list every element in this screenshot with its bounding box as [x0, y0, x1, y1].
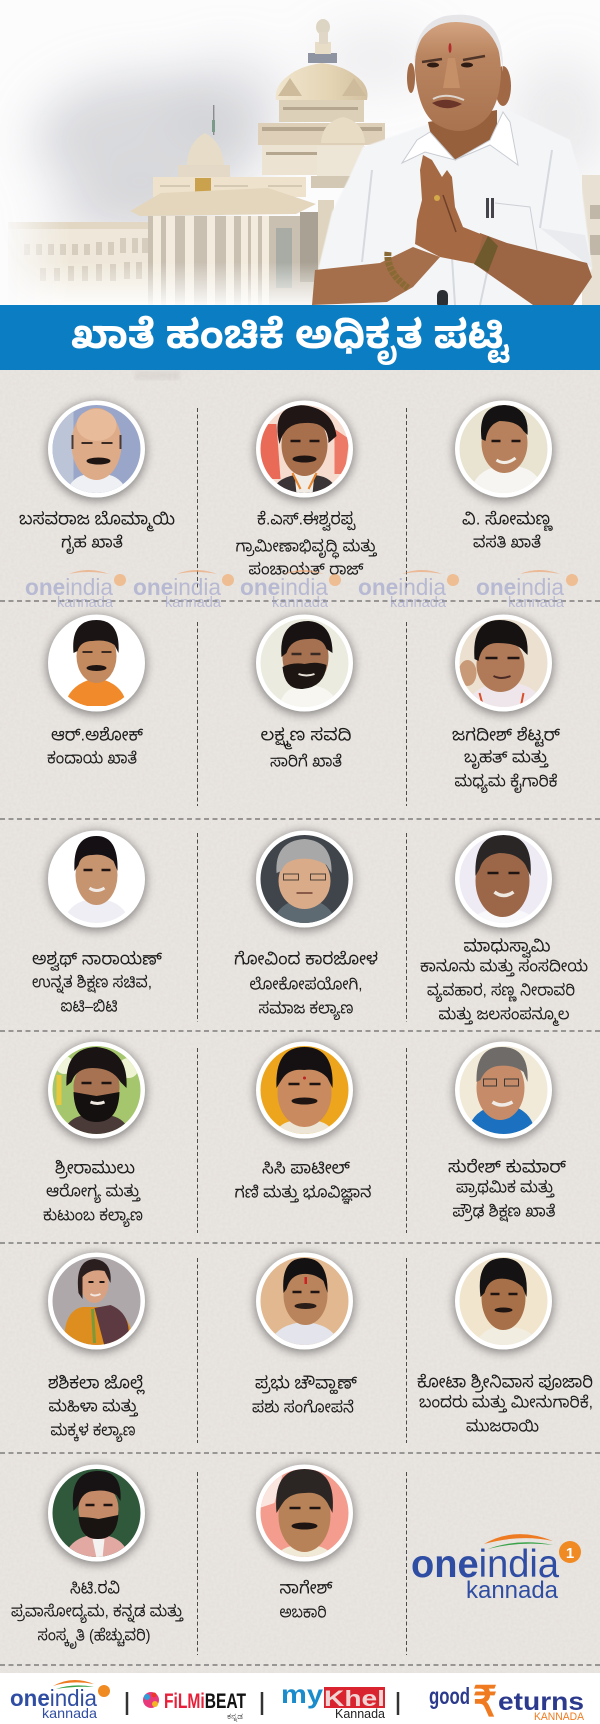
header illustration: [0, 0, 600, 308]
name and portfolio: [47, 726, 144, 768]
watermarks: oneindia kannada: [25, 570, 578, 611]
watermarks: oneindia kannada: kannada: [508, 595, 565, 611]
head: [407, 15, 511, 131]
logo: goodReturns: good: [429, 1683, 470, 1709]
name and portfolio: ಶ್ರೀರಾಮುಲು: [55, 1158, 135, 1180]
logo: oneindia kannada large: oneindia: [411, 1543, 559, 1586]
portrait: [46, 400, 146, 501]
name and portfolio: ಮಕ್ಕಳ ಕಲ್ಯಾಣ: [50, 1422, 136, 1442]
name and portfolio: [252, 1374, 358, 1416]
name and portfolio: ಸಾರಿಗೆ ಖಾತೆ: [270, 754, 342, 770]
name and portfolio: ಸಿಟಿ.ರವಿ: [70, 1578, 120, 1598]
minister: K.S. Eshwarappa: [236, 400, 377, 578]
logo: goodReturns: eturns: [498, 1688, 584, 1716]
minister: R. Ashok: [46, 614, 146, 768]
name and portfolio: ಪಂಚಾಯತ್ ರಾಜ್: [248, 562, 364, 578]
portrait: [254, 830, 354, 931]
watermarks: oneindia kannada: oneindia: [25, 574, 113, 600]
name and portfolio: [236, 510, 377, 578]
name and portfolio: ಆರೋಗ್ಯ ಮತ್ತು: [46, 1184, 141, 1204]
shirt: [318, 124, 592, 272]
logo: Filmibeat: FiLMiBEAT: [164, 1690, 246, 1713]
logo: goodReturns: [429, 1678, 585, 1724]
name and portfolio: [260, 726, 352, 770]
portrait: [254, 614, 354, 715]
wristwatch: [474, 236, 498, 272]
name and portfolio: ಜಗದೀಶ್ ಶೆಟ್ಟರ್: [452, 726, 561, 748]
logo: oneindia kannada large: [411, 1534, 581, 1604]
logo: goodReturns: ₹: [473, 1678, 497, 1724]
minister: C.T. Ravi: [11, 1464, 184, 1650]
minister: Basavaraj Bommai: [19, 400, 175, 554]
logo: myKhel: [281, 1679, 386, 1721]
name and portfolio: ಗ್ರಾಮೀಣಾಭಿವೃದ್ಧಿ ಮತ್ತು: [236, 538, 377, 560]
name and portfolio: ಲೋಕೋಪಯೋಗಿ,: [250, 976, 362, 994]
logo: oneindia kannada: oneindia: [10, 1685, 97, 1711]
logo: Filmibeat: ಕನ್ನಡ: [227, 1711, 243, 1722]
portrait: [254, 400, 354, 501]
minister: Shashikala Jolle: [46, 1252, 146, 1442]
name and portfolio: ಪ್ರಾಥಮಿಕ ಮತ್ತು: [456, 1180, 555, 1198]
name and portfolio: ಬೃಹತ್ ಮತ್ತು: [464, 750, 549, 770]
name and portfolio: ಸುರೇಶ್ ಕುಮಾರ್: [448, 1158, 567, 1176]
name and portfolio: ಕೆ.ಎಸ್.ಈಶ್ವರಪ್ಪ: [257, 510, 356, 532]
name and portfolio: ಕಾನೂನು ಮತ್ತು ಸಂಸದೀಯ: [420, 958, 588, 976]
portrait: [46, 1252, 146, 1353]
name and portfolio: ಸಿಸಿ ಪಾಟೀಲ್: [262, 1158, 350, 1178]
name and portfolio: ಗೋವಿಂದ ಕಾರಜೋಳ: [234, 950, 378, 968]
name and portfolio: [19, 510, 175, 554]
clouds: [35, 30, 600, 240]
logo: oneindia kannada large: 1: [566, 1545, 574, 1562]
name and portfolio: ಮತ್ತು ಜಲಸಂಪನ್ಮೂಲ: [438, 1006, 570, 1026]
title banner: ಖಾತೆ ಹಂಚಿಕೆ ಅಧಿಕೃತ ಪಟ್ಟಿ: [71, 313, 510, 365]
name and portfolio: ಉನ್ನತ ಶಿಕ್ಷಣ ಸಚಿವ,: [32, 974, 152, 994]
name and portfolio: [43, 1158, 143, 1228]
portrait: [46, 830, 146, 931]
microphone: [437, 290, 448, 305]
minister: Kota Srinivas Poojary: [417, 1252, 593, 1436]
name and portfolio: ಸಂಸ್ಕೃತಿ (ಹೆಚ್ಚುವರಿ): [38, 1628, 150, 1650]
minister: B.C. Patil: [234, 1042, 372, 1204]
portrait: [46, 614, 146, 715]
name and portfolio: [48, 1374, 145, 1442]
name and portfolio: ಮಹಿಳಾ ಮತ್ತು: [48, 1398, 138, 1416]
minister: Ashwath Narayan: [32, 830, 163, 1016]
watermarks: oneindia kannada: kannada: [272, 595, 329, 611]
name and portfolio: ಪ್ರವಾಸೋದ್ಯಮ, ಕನ್ನಡ ಮತ್ತು: [11, 1604, 184, 1624]
name and portfolio: ಗಣಿ ಮತ್ತು ಭೂವಿಜ್ಞಾನ: [234, 1184, 372, 1204]
minister: V. Somanna: [454, 400, 554, 552]
man with folded hands: [312, 15, 592, 308]
collar: [402, 132, 455, 163]
minister: Laxman Savadi: [254, 614, 354, 770]
minister: Sriramulu: [43, 1042, 146, 1228]
name and portfolio: ಮಾಧುಸ್ವಾಮಿ: [464, 936, 550, 958]
bracelet: [388, 252, 408, 288]
building: Vidhana Soudha: [0, 19, 600, 305]
minister: Nagesh: [254, 1464, 354, 1622]
portrait: [254, 1042, 354, 1142]
neck: [428, 110, 497, 160]
pocket and pens: [486, 198, 494, 218]
name and portfolio: [234, 950, 378, 1020]
watermarks: oneindia kannada: oneindia: [133, 574, 221, 600]
logo: Filmibeat: [143, 1690, 246, 1722]
name and portfolio: ವ್ಯವಹಾರ, ಸಣ್ಣ ನೀರಾವರಿ: [427, 982, 575, 1002]
name and portfolio: ಆರ್.ಅಶೋಕ್: [51, 726, 144, 744]
title banner: [0, 305, 600, 370]
minister: Govind Karjol: [234, 830, 378, 1020]
logo: oneindia kannada: [10, 1680, 110, 1721]
name and portfolio: [452, 726, 561, 794]
logo: goodReturns: KANNADA: [534, 1711, 585, 1723]
name and portfolio: [417, 1372, 593, 1436]
portrait: [254, 1252, 354, 1353]
name and portfolio: ಸಮಾಜ ಕಲ್ಯಾಣ: [258, 1000, 354, 1020]
name and portfolio: ಕುಟುಂಬ ಕಲ್ಯಾಣ: [43, 1208, 143, 1228]
name and portfolio: [420, 936, 588, 1026]
portrait: [454, 830, 554, 931]
watermarks: oneindia kannada: kannada: [390, 595, 447, 611]
logo: myKhel: Khel: [324, 1686, 385, 1711]
name and portfolio: ಲಕ್ಷ್ಮಣ ಸವದಿ: [260, 726, 352, 750]
minister: Suresh Kumar: [448, 1042, 567, 1222]
watermarks: oneindia kannada: oneindia: [476, 574, 564, 600]
portrait: [454, 1042, 554, 1142]
watermarks: oneindia kannada: oneindia: [358, 574, 446, 600]
name and portfolio: ಮುಜರಾಯಿ: [466, 1418, 539, 1436]
name and portfolio: ಅಬಕಾರಿ: [280, 1604, 326, 1622]
name and portfolio: ಪಶು ಸಂಗೋಪನೆ: [252, 1398, 354, 1416]
name and portfolio: ಕಂದಾಯ ಖಾತೆ: [47, 750, 137, 768]
name and portfolio: [448, 1158, 567, 1222]
name and portfolio: ಅಶ್ವಥ್ ನಾರಾಯಣ್: [32, 950, 163, 972]
minister: Jagadish Shettar: [452, 614, 561, 794]
minister: Madhuswamy: [420, 830, 588, 1026]
name and portfolio: ವಸತಿ ಖಾತೆ: [473, 534, 541, 552]
logo: oneindia kannada: kannada: [42, 1705, 97, 1721]
minister: Prabhu Chauhan: [252, 1252, 358, 1416]
portrait: [46, 1042, 146, 1142]
watermarks: oneindia kannada: kannada: [165, 595, 222, 611]
name and portfolio: ಕೋಟಾ ಶ್ರೀನಿವಾಸ ಪೂಜಾರಿ: [417, 1372, 593, 1394]
name and portfolio: [280, 1578, 333, 1622]
name and portfolio: ಮಧ್ಯಮ ಕೈಗಾರಿಕೆ: [454, 774, 558, 794]
name and portfolio: [234, 1158, 372, 1204]
portrait: [454, 1252, 554, 1353]
name and portfolio: ನಾಗೇಶ್: [280, 1578, 333, 1598]
name and portfolio: ವಿ. ಸೋಮಣ್ಣ: [462, 510, 553, 532]
portrait: [454, 614, 554, 715]
name and portfolio: ಬಸವರಾಜ ಬೊಮ್ಮಾಯಿ: [19, 510, 175, 532]
name and portfolio: ಪ್ರಭು ಚೌವ್ಹಾಣ್: [255, 1374, 358, 1394]
logo: myKhel: Kannada: [335, 1706, 386, 1721]
name and portfolio: [462, 510, 553, 552]
portrait: [454, 400, 554, 501]
name and portfolio: ಪ್ರೌಢ ಶಿಕ್ಷಣ ಖಾತೆ: [452, 1202, 556, 1222]
portrait: [254, 1464, 354, 1565]
watermarks: oneindia kannada: kannada: [57, 595, 114, 611]
arms and hands: [312, 247, 440, 305]
name and portfolio: [32, 950, 163, 1016]
name and portfolio: ಬಂದರು ಮತ್ತು ಮೀನುಗಾರಿಕೆ,: [419, 1394, 593, 1412]
name and portfolio: ಐಟಿ–ಬಿಟಿ: [60, 998, 118, 1016]
name and portfolio: ಗೃಹ ಖಾತೆ: [61, 534, 123, 554]
logo: myKhel: my: [281, 1679, 324, 1709]
name and portfolio: ಶಶಿಕಲಾ ಜೊಲ್ಲೆ: [48, 1374, 145, 1396]
logo: oneindia kannada large: kannada: [466, 1577, 559, 1604]
footer logo strip: [0, 1673, 600, 1724]
watermarks: oneindia kannada: oneindia: [240, 574, 328, 600]
name and portfolio: [11, 1578, 184, 1650]
portrait: [46, 1464, 146, 1565]
